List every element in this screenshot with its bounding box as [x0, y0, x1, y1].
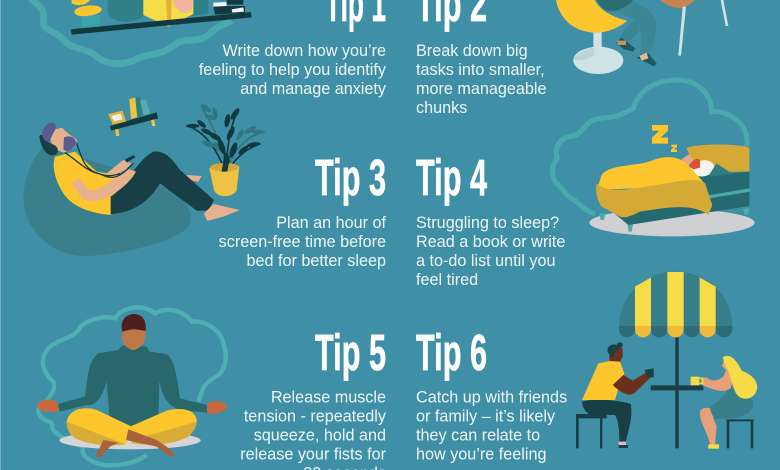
text: Tip 5: tension - repeatedly — [244, 408, 387, 426]
text: Tip 2: more manageable — [416, 80, 546, 98]
feet — [126, 429, 176, 457]
pole and table — [675, 337, 679, 448]
illustration: journal on shelf in thought cloud — [30, 0, 252, 64]
text: Tip 3: Plan an hour of — [276, 214, 387, 232]
text: Tip 5: Release muscle — [271, 388, 386, 406]
text: Tip 4: feel tired — [416, 271, 478, 289]
plant — [186, 103, 265, 196]
text: Tip 2 — [416, 42, 546, 117]
text: Tip 6: Catch up with friends — [416, 388, 567, 406]
text: Tip 1: feeling to help you identify — [199, 61, 387, 79]
text: Tip 2: tasks into smaller, — [416, 61, 545, 79]
text: Tip 3: bed for better sleep — [247, 252, 386, 270]
thought cloud — [38, 307, 226, 465]
illustration: two friends at cafe table under umbrella — [576, 272, 757, 449]
shirt — [54, 152, 127, 215]
text: Tip 5 — [240, 388, 387, 470]
head — [48, 128, 77, 153]
text: Tip 1: and manage anxiety — [240, 80, 387, 98]
wall shelf — [108, 97, 158, 136]
text: Tip 6: or family – it’s likely — [416, 408, 556, 426]
woman — [727, 419, 753, 448]
text: Tip 6: how you’re feeling — [416, 446, 546, 464]
text: Tip 5: squeeze, hold and — [254, 426, 386, 444]
text: Tip 4: a to-do list until you — [416, 252, 555, 270]
sleeves and torso — [57, 345, 207, 427]
heading: Tip 6: Tip 6 — [416, 324, 487, 381]
text: Tip 4: Struggling to sleep? — [416, 214, 559, 232]
umbrella canopy — [619, 272, 732, 327]
legs — [67, 408, 132, 445]
heading: Tip 5: Tip 5 — [315, 324, 386, 381]
heading: Tip 4: Tip 4 — [416, 149, 487, 206]
bed legs — [599, 208, 749, 232]
back foot — [187, 175, 202, 182]
mat — [59, 431, 201, 449]
man — [576, 414, 607, 448]
text: Tip 5: release your fists for — [240, 446, 387, 464]
beanbag — [24, 147, 191, 256]
text: Tip 4: Read a book or write — [416, 233, 565, 251]
floor shadow — [589, 209, 755, 236]
heading: Tip 3: Tip 3 — [315, 149, 386, 206]
text: Tip 2: Break down big — [416, 42, 528, 60]
text: Tip 3: screen-free time before — [219, 233, 386, 251]
text: Tip 6: they can relate to — [416, 426, 540, 444]
headphones — [39, 135, 58, 155]
illustration: man relaxing on beanbag with plant and shelf — [24, 97, 265, 256]
hands — [37, 399, 228, 414]
illustration: meditating person — [37, 307, 228, 465]
text: Tip 3 — [219, 214, 387, 270]
text: Tip 4 — [416, 214, 565, 289]
bed frame — [598, 172, 749, 225]
trousers — [111, 151, 214, 214]
illustration: person at desk on swivel chair — [556, 0, 728, 74]
arm — [72, 169, 136, 201]
head — [122, 328, 146, 350]
text: Tip 1 — [199, 42, 387, 98]
pillow and head — [690, 158, 716, 178]
thought cloud — [552, 80, 747, 213]
headboard — [687, 145, 749, 172]
zzz — [652, 125, 668, 144]
illustration: person sleeping in bed — [552, 80, 755, 236]
blanket — [597, 157, 706, 190]
text: Tip 6 — [416, 388, 567, 464]
text: Tip 2: chunks — [416, 99, 467, 117]
text: Tip 1: Write down how you’re — [223, 42, 386, 60]
front foot — [204, 204, 240, 221]
cable — [65, 143, 133, 177]
